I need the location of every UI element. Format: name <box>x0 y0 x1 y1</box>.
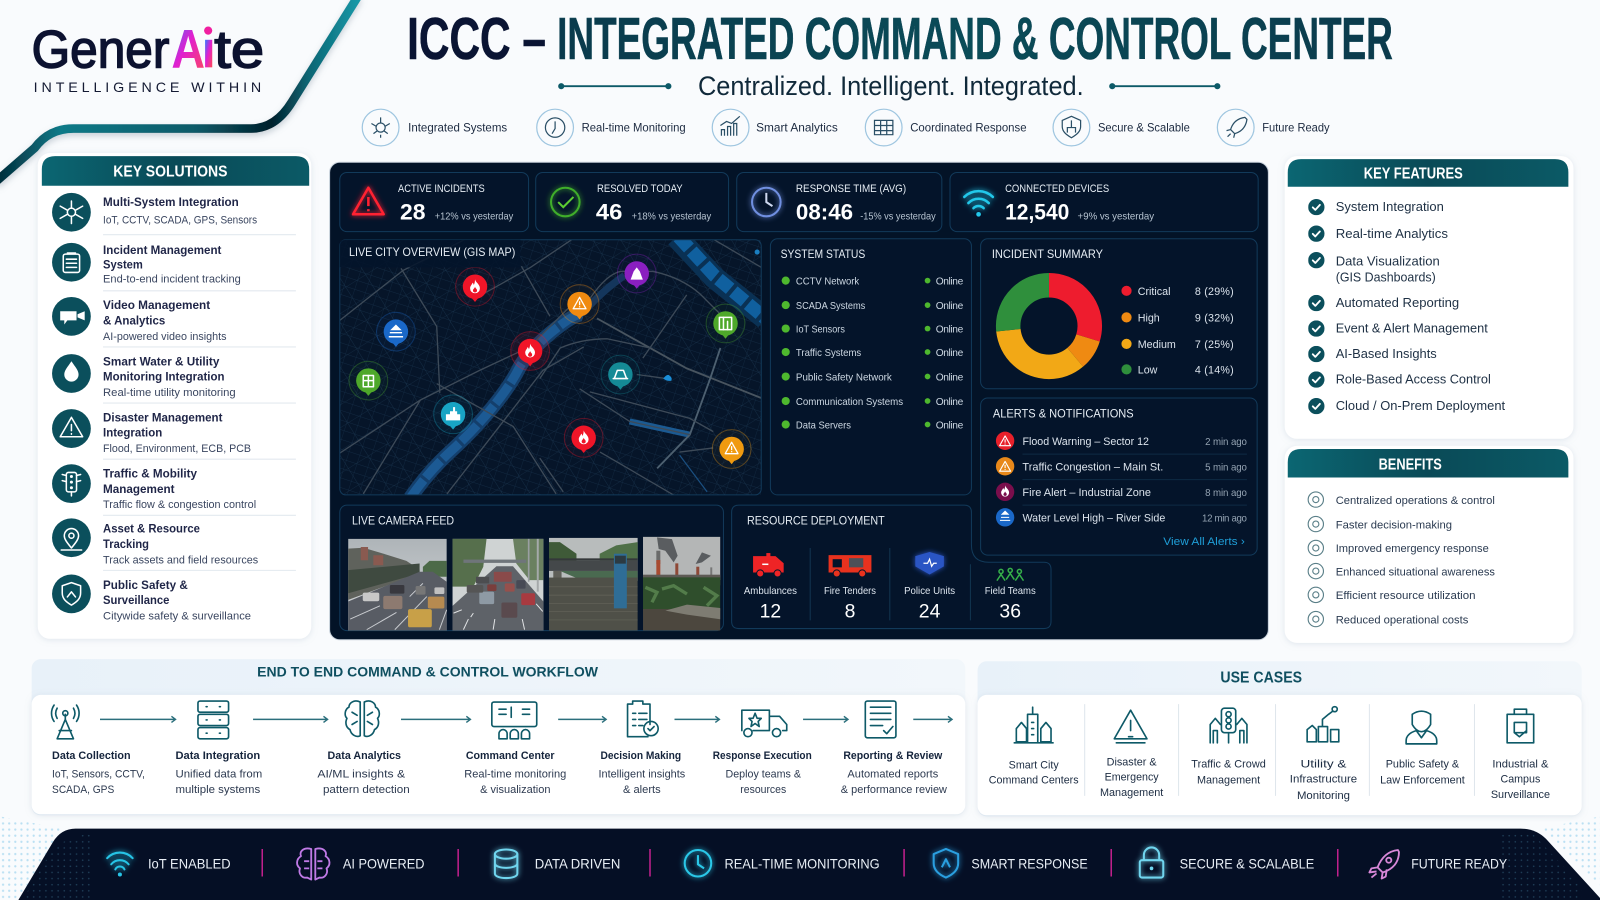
solution: video management <box>52 297 227 343</box>
panel: alerts and notifications: ALERTS & NOTIFICATIONS <box>993 407 1134 420</box>
solution: asset tracking <box>52 518 258 566</box>
panel: incident summary <box>981 239 1257 389</box>
title: ICCC – <box>407 5 546 72</box>
resource: fire tenders <box>824 555 876 622</box>
map pin: water blue <box>377 312 415 351</box>
solution: video management: Video Management <box>103 298 210 312</box>
panel: benefits: Efficient resource utilization <box>1336 590 1476 602</box>
footer: iot enabled: IoT ENABLED <box>148 856 231 872</box>
alert: traffic: 5 min ago <box>1205 462 1247 473</box>
solution: asset tracking: Track assets and field resources <box>103 554 258 566</box>
solution: incident management: End-to-end incident tracking <box>103 274 241 286</box>
header swoosh <box>0 0 358 182</box>
step: response execution <box>713 710 812 796</box>
kpi: response time: -15% vs yesterday <box>860 211 936 222</box>
panel: benefits: BENEFITS <box>1379 456 1442 473</box>
use case: utility: Infrastructure <box>1290 774 1357 786</box>
use case: traffic: Traffic & Crowd <box>1191 758 1266 770</box>
panel: benefits: Centralized operations & control <box>1336 495 1495 507</box>
panel: alerts and notifications: View All Alerts › <box>1163 536 1245 548</box>
panel: system status: Online <box>936 277 964 288</box>
panel: benefits: Faster decision-making <box>1336 520 1452 532</box>
logo: te <box>214 20 264 79</box>
panel: resource deployment <box>732 505 1051 629</box>
use case: public safety: Public Safety & <box>1386 758 1459 770</box>
step: reporting and review: & performance review <box>841 784 947 796</box>
solution: video management: & Analytics <box>103 313 165 327</box>
footer: future ready <box>1369 850 1508 879</box>
capability: future ready: Future Ready <box>1262 121 1330 135</box>
panel: resource deployment: RESOURCE DEPLOYMENT <box>747 514 885 527</box>
footer: secure and scalable: SECURE & SCALABLE <box>1180 856 1314 872</box>
panel: dashboard <box>330 162 1268 640</box>
donut legend: High <box>1138 312 1160 324</box>
use case: industrial: Industrial & <box>1492 758 1548 770</box>
panel: system status <box>770 239 971 495</box>
panel: key features: KEY FEATURES <box>1364 166 1463 183</box>
kpi: active incidents: 28 <box>400 199 426 224</box>
panel: live camera feed <box>340 505 723 631</box>
panel: system status: Online <box>936 325 964 336</box>
panel: system status: SYSTEM STATUS <box>781 248 865 261</box>
step: data integration: Data Integration <box>176 750 260 762</box>
map pin: teal <box>601 355 640 394</box>
map pin: warning south-east <box>712 430 751 468</box>
step: response execution: Deploy teams & <box>726 769 801 781</box>
capability: coordinated response <box>865 109 1027 146</box>
panel: key features: System Integration <box>1336 199 1444 214</box>
footer: secure and scalable <box>1140 847 1314 878</box>
panel: system status: Data Servers <box>796 421 851 432</box>
step: command center: Real-time monitoring <box>464 769 566 781</box>
alert: flood: 2 min ago <box>1205 437 1247 448</box>
use case: traffic: Management <box>1197 775 1260 787</box>
map pin: green east <box>706 304 745 343</box>
subtitle: Centralized. Intelligent. Integrated. <box>698 71 1084 101</box>
step: reporting and review: Automated reports <box>847 769 938 781</box>
map pin: fire south <box>564 418 603 457</box>
capability: coordinated response: Coordinated Response <box>910 121 1027 135</box>
step: decision making: Decision Making <box>601 750 681 762</box>
map heading: LIVE CITY OVERVIEW (GIS MAP) <box>349 246 515 259</box>
kpi: response time: RESPONSE TIME (AVG) <box>796 183 906 195</box>
panel: benefits <box>1285 446 1573 643</box>
camera: highway with buildings <box>348 538 447 631</box>
footer: smart response <box>934 849 1088 878</box>
capability: real-time monitoring: Real-time Monitoring <box>582 121 686 135</box>
kpi: active incidents: +12% vs yesterday <box>435 211 513 222</box>
resource: fire tenders: Fire Tenders <box>824 586 876 597</box>
step: command center: Command Center <box>466 750 555 762</box>
camera: traffic avenue <box>452 538 544 631</box>
donut legend: Low <box>1138 364 1158 376</box>
solution: incident management: System <box>103 257 143 271</box>
camera: industrial chimneys <box>643 536 720 630</box>
kpi: active incidents: ACTIVE INCIDENTS <box>398 183 485 195</box>
donut legend: 9 (32%) <box>1195 312 1234 324</box>
panel: key features: Data Visualization <box>1336 253 1440 268</box>
logo: INTELLIGENCE WITHIN <box>34 80 261 96</box>
logo: A <box>171 17 205 79</box>
use case: public safety <box>1380 711 1465 787</box>
panel: system status: Communication Systems <box>796 397 903 408</box>
kpi: response time <box>737 172 942 232</box>
solution: disaster management: Integration <box>103 426 162 440</box>
solution: traffic and mobility: Management <box>103 482 174 496</box>
step: reporting and review <box>841 701 947 796</box>
panel: system status: SCADA Systems <box>796 301 865 312</box>
panel: system status: IoT Sensors <box>796 325 845 336</box>
panel: incident summary: INCIDENT SUMMARY <box>992 248 1103 261</box>
step: data analytics <box>317 701 410 796</box>
workflow arrows <box>100 716 952 722</box>
solution: disaster management: Flood, Environment, ECB, PCB <box>103 443 251 455</box>
alert: fire: 8 min ago <box>1205 488 1247 499</box>
donut legend: 7 (25%) <box>1195 339 1234 351</box>
donut legend: 4 (14%) <box>1195 364 1234 376</box>
map pin: green west <box>349 361 388 400</box>
resource: ambulances: 12 <box>760 600 781 622</box>
decorative corner dots <box>0 816 1600 900</box>
logo: Gener <box>32 20 169 79</box>
panel: workflow: END TO END COMMAND & CONTROL WORKFLOW <box>257 665 598 681</box>
use case: smart city <box>989 707 1079 787</box>
use case: disaster <box>1100 710 1163 799</box>
solution: traffic and mobility: Traffic & Mobility <box>103 467 197 481</box>
alert: fire: Fire Alert – Industrial Zone <box>1022 487 1151 499</box>
footer: data driven: DATA DRIVEN <box>535 856 620 872</box>
alert: water: Water Level High – River Side <box>1022 512 1165 524</box>
step: data collection: IoT, Sensors, CCTV, <box>52 769 145 781</box>
footer: data driven <box>495 849 620 878</box>
logo <box>32 17 264 96</box>
panel: benefits: Reduced operational costs <box>1336 614 1469 626</box>
capability: smart analytics <box>712 109 838 146</box>
solution: public safety: Citywide safety & surveillance <box>103 610 251 622</box>
alert: flood: Flood Warning – Sector 12 <box>1022 436 1149 448</box>
footer: iot enabled <box>107 853 231 877</box>
map pin: purple site <box>617 254 656 293</box>
panel: key features: (GIS Dashboards) <box>1336 270 1436 285</box>
use case: industrial: Surveillance <box>1491 789 1550 801</box>
panel: system status: Online <box>936 301 964 312</box>
kpi: connected devices: CONNECTED DEVICES <box>1005 183 1109 195</box>
capability: smart analytics: Smart Analytics <box>756 121 838 135</box>
step: decision making <box>598 701 685 796</box>
resource: field teams <box>985 568 1036 622</box>
capability row <box>362 109 1330 146</box>
panel: key solutions: KEY SOLUTIONS <box>113 164 228 181</box>
solution: smart water: Smart Water & Utility <box>103 354 220 368</box>
panel: system status: Public Safety Network <box>796 373 893 384</box>
alert: traffic <box>996 457 1247 476</box>
map heading <box>340 240 520 267</box>
step: command center <box>464 702 566 796</box>
solution: public safety: Surveillance <box>103 593 170 607</box>
use case: utility <box>1290 707 1357 802</box>
step: data integration: multiple systems <box>176 784 260 796</box>
alert: water <box>996 508 1247 527</box>
solution: disaster management: Disaster Management <box>103 410 222 424</box>
step: reporting and review: Reporting & Review <box>843 750 943 762</box>
use case: utility: Utility & <box>1301 758 1346 770</box>
panel: key features: Real-time Analytics <box>1336 226 1448 241</box>
footer: real-time monitoring <box>685 850 880 877</box>
donut chart <box>1008 285 1090 367</box>
capability: secure and scalable: Secure & Scalable <box>1098 121 1190 135</box>
donut legend: 8 (29%) <box>1195 286 1234 298</box>
panel: key features: AI-Based Insights <box>1336 346 1437 361</box>
step: decision making: Intelligent insights <box>598 769 685 781</box>
panel: system status: Online <box>936 421 964 432</box>
footer: ai powered: AI POWERED <box>343 856 424 872</box>
alert: flood <box>996 432 1247 450</box>
kpi: active incidents <box>340 172 529 232</box>
subtitle <box>558 71 1220 101</box>
use case: disaster: Disaster & <box>1107 756 1157 768</box>
use case: smart city: Command Centers <box>989 775 1079 787</box>
resource: field teams: Field Teams <box>985 586 1036 597</box>
resource: ambulances: Ambulances <box>744 586 797 597</box>
footer: smart response: SMART RESPONSE <box>971 856 1088 872</box>
use case: disaster: Emergency <box>1105 772 1159 784</box>
solution: incident management: Incident Management <box>103 243 221 257</box>
solution: traffic and mobility: Traffic flow & congestion control <box>103 499 256 511</box>
step: data collection: Data Collection <box>52 750 131 762</box>
panel: system status: CCTV Network <box>796 277 860 288</box>
capability: future ready <box>1217 109 1330 146</box>
kpi: response time: 08:46 <box>796 199 853 224</box>
solution: disaster management <box>52 409 251 455</box>
panel: key features: Role-Based Access Control <box>1336 372 1491 387</box>
panel: key features: Event & Alert Management <box>1336 321 1488 336</box>
solution: asset tracking: Tracking <box>103 537 149 551</box>
donut legend <box>1121 286 1234 376</box>
kpi: resolved today: +18% vs yesterday <box>632 211 711 222</box>
resource: field teams: 36 <box>999 600 1021 622</box>
step: data analytics: AI/ML insights & <box>317 769 405 781</box>
panel: benefits: Enhanced situational awareness <box>1336 567 1495 579</box>
step: data collection <box>52 705 145 796</box>
solution: incident management <box>52 243 241 286</box>
panel: system status: Traffic Systems <box>796 348 861 359</box>
solution: smart water <box>52 354 236 399</box>
capability: integrated systems: Integrated Systems <box>408 121 507 135</box>
resource: police units: Police Units <box>904 586 955 597</box>
kpi: connected devices: +9% vs yesterday <box>1078 211 1154 222</box>
solution: traffic and mobility <box>52 464 256 511</box>
alert: traffic: Traffic Congestion – Main St. <box>1022 461 1163 473</box>
step: data analytics: pattern detection <box>323 784 410 796</box>
solution: multi-system integration: IoT, CCTV, SCADA, GPS, Sensors <box>103 214 257 226</box>
use case: disaster: Management <box>1100 787 1163 799</box>
footer: future ready: FUTURE READY <box>1411 856 1508 872</box>
panel: benefits: Improved emergency response <box>1336 543 1489 555</box>
resource: ambulances <box>744 553 797 622</box>
panel: system status: Online <box>936 373 964 384</box>
step: response execution: resources <box>740 784 786 796</box>
solution: public safety: Public Safety & <box>103 578 188 592</box>
panel: use cases <box>978 661 1582 816</box>
panel: key solutions <box>38 153 311 639</box>
resource: police units: 24 <box>919 600 941 622</box>
step: data analytics: Data Analytics <box>328 750 401 762</box>
panel: live camera feed: LIVE CAMERA FEED <box>352 514 454 527</box>
solution: smart water: Monitoring Integration <box>103 370 224 384</box>
map pin: fire center <box>511 332 549 370</box>
step: data integration <box>176 701 262 796</box>
donut legend: Critical <box>1138 286 1170 298</box>
kpi: resolved today: 46 <box>596 199 622 224</box>
step: response execution: Response Execution <box>713 750 812 762</box>
use case: smart city: Smart City <box>1009 759 1059 771</box>
kpi: resolved today <box>536 172 729 232</box>
solution: video management: AI-powered video insights <box>103 331 227 343</box>
step: data collection: SCADA, GPS <box>52 784 114 796</box>
panel: use cases: USE CASES <box>1220 670 1302 687</box>
panel: system status: Online <box>936 348 964 359</box>
use case: industrial <box>1491 709 1550 801</box>
panel: key features <box>1285 156 1573 439</box>
panel: alerts and notifications <box>981 398 1257 555</box>
footer: ai powered <box>297 849 424 880</box>
map pin: fire north <box>456 267 494 306</box>
capability: real-time monitoring <box>537 109 686 146</box>
solution: multi-system integration <box>52 193 257 232</box>
use case: public safety: Law Enforcement <box>1380 775 1465 787</box>
footer: real-time monitoring: REAL-TIME MONITORING <box>724 856 880 872</box>
kpi: connected devices: 12,540 <box>1005 199 1069 224</box>
panel: system status: Online <box>936 397 964 408</box>
map pin: warning <box>560 285 599 323</box>
use case: traffic <box>1191 708 1266 787</box>
kpi: connected devices <box>950 172 1258 232</box>
donut legend: Medium <box>1138 339 1176 351</box>
alert: fire <box>996 483 1247 501</box>
capability: integrated systems <box>362 109 507 146</box>
solution: public safety <box>52 574 251 622</box>
step: data integration: Unified data from <box>176 769 262 781</box>
step: decision making: & alerts <box>623 784 661 796</box>
use case: industrial: Campus <box>1501 774 1540 786</box>
solution: asset tracking: Asset & Resource <box>103 522 200 536</box>
panel: workflow <box>32 659 965 815</box>
panel: key features: Cloud / On-Prem Deployment <box>1336 398 1506 413</box>
alert: water: 12 min ago <box>1202 513 1247 524</box>
kpi: resolved today: RESOLVED TODAY <box>597 183 683 195</box>
step: command center: & visualization <box>480 784 551 796</box>
footer bar <box>18 829 1600 900</box>
map pin: cyan <box>434 395 472 434</box>
panel: key features: Automated Reporting <box>1336 295 1459 310</box>
map: live city overview <box>340 237 765 498</box>
solution: smart water: Real-time utility monitoring <box>103 387 236 399</box>
resource: police units <box>904 552 955 622</box>
solution: multi-system integration: Multi-System Integration <box>103 195 239 209</box>
capability: secure and scalable <box>1053 109 1190 146</box>
use case: utility: Monitoring <box>1297 790 1350 802</box>
resource: fire tenders: 8 <box>845 600 855 622</box>
camera: flooded river with gauge <box>549 538 638 630</box>
